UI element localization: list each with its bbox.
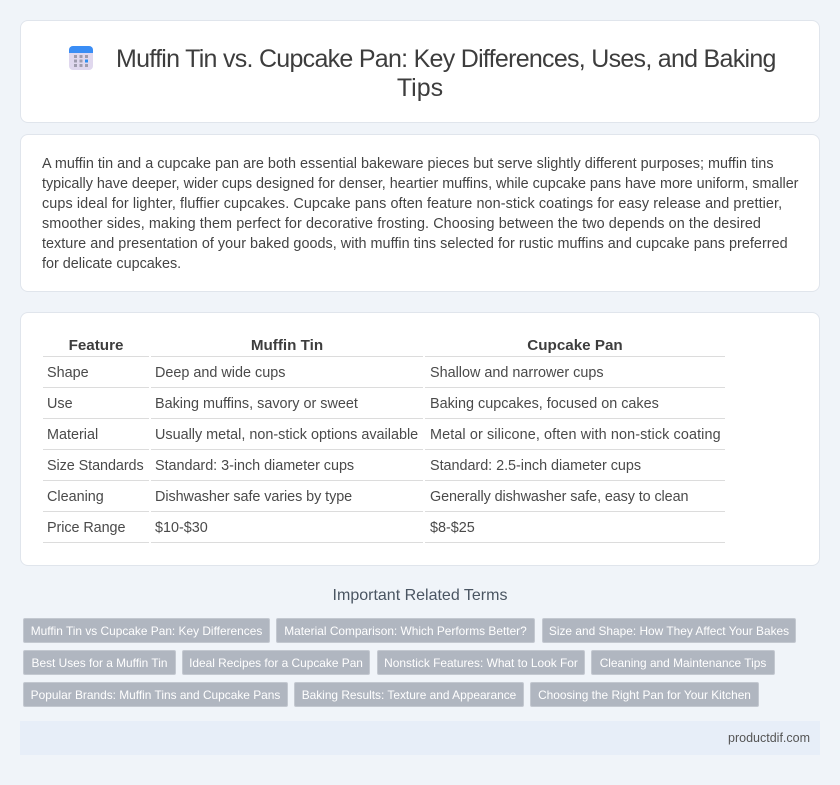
tag: Material Comparison: Which Performs Better? xyxy=(284,624,527,638)
row: Cleaning: Generally dishwasher safe, easy to clean xyxy=(430,489,688,505)
tag xyxy=(276,618,535,643)
text block: introduction: smoother sides, making them perfect for decorative frosting. Choosing between the two depends on the desired xyxy=(42,216,761,232)
row: Shape xyxy=(47,365,604,381)
text block: introduction: for delicate cupcakes. xyxy=(42,256,181,272)
tag xyxy=(23,618,270,643)
text block: introduction: A muffin tin and a cupcake pan are both essential bakeware pieces but serve slightly different purposes; muffin tins xyxy=(42,156,774,172)
tag xyxy=(377,650,585,675)
row: Size Standards xyxy=(47,458,641,474)
tag xyxy=(182,650,370,675)
row: Cleaning xyxy=(47,489,688,505)
row: Use xyxy=(47,396,659,412)
row: Use: Baking cupcakes, focused on cakes xyxy=(430,396,659,412)
footer bar xyxy=(20,721,820,755)
text block: introduction xyxy=(42,156,798,272)
row: Price Range: $8-$25 xyxy=(430,520,475,536)
row: Price Range xyxy=(47,520,475,536)
tag xyxy=(530,682,759,707)
tag: Nonstick Features: What to Look For xyxy=(384,656,578,670)
title xyxy=(116,45,776,102)
row: Price Range: $10-$30 xyxy=(155,520,208,536)
text block: introduction: typically have deeper, wider cups designed for denser, heartier muffins, while cupcake pans have more uniform, smaller xyxy=(42,176,798,192)
tag: Choosing the Right Pan for Your Kitchen xyxy=(538,688,751,702)
heading: Important Related Terms: Important Related Terms xyxy=(333,587,507,604)
tag: Size and Shape: How They Affect Your Bakes xyxy=(549,624,789,638)
row: Size Standards: Size Standards xyxy=(47,458,144,474)
tag: Cleaning and Maintenance Tips xyxy=(600,656,766,670)
panel: introduction xyxy=(20,134,820,292)
tag: Muffin Tin vs Cupcake Pan: Key Differences xyxy=(31,624,262,638)
row: Material: Metal or silicone, often with non-stick coating xyxy=(430,427,721,443)
row: Shape: Shallow and narrower cups xyxy=(430,365,604,381)
title: Muffin Tin vs. Cupcake Pan: Key Differences, Uses, and Baking xyxy=(116,45,776,73)
tag xyxy=(23,650,176,675)
text block: introduction: texture and presentation of your baked goods, with muffin tins selected for rustic muffins and cupcake pans preferred xyxy=(42,236,788,252)
tag: Popular Brands: Muffin Tins and Cupcake Pans xyxy=(31,688,280,702)
title: Tips xyxy=(397,74,443,102)
row: Use: Baking muffins, savory or sweet xyxy=(155,396,358,412)
tag xyxy=(542,618,796,643)
text block: introduction: cups ideal for lighter, fluffier cupcakes. Cupcake pans often feature non-stick coatings for easy release and prettier, xyxy=(42,196,782,212)
table header: Muffin Tin: Muffin Tin xyxy=(251,337,323,354)
row: Size Standards: Standard: 2.5-inch diameter cups xyxy=(430,458,641,474)
row: Use: Use xyxy=(47,396,73,412)
tag: Ideal Recipes for a Cupcake Pan xyxy=(189,656,363,670)
tag: Best Uses for a Muffin Tin xyxy=(32,656,167,670)
row: Material: Material xyxy=(47,427,98,443)
tag: Baking Results: Texture and Appearance xyxy=(302,688,516,702)
row: Cleaning: Dishwasher safe varies by type xyxy=(155,489,352,505)
tag list: related terms xyxy=(23,618,796,707)
panel: comparison table xyxy=(20,312,820,566)
tag xyxy=(591,650,775,675)
footer text: productdif.com: productdif.com xyxy=(728,731,810,745)
table header: Feature: Feature xyxy=(69,337,123,354)
table header: Cupcake Pan: Cupcake Pan xyxy=(527,337,623,354)
tag xyxy=(294,682,524,707)
row: Material xyxy=(47,427,721,443)
row: Size Standards: Standard: 3-inch diameter cups xyxy=(155,458,354,474)
row: Cleaning: Cleaning xyxy=(47,489,104,505)
row: Material: Usually metal, non-stick options available xyxy=(155,427,418,443)
tag xyxy=(23,682,288,707)
icon: calendar grid xyxy=(69,46,93,70)
panel: header xyxy=(20,20,820,123)
row: Price Range: Price Range xyxy=(47,520,125,536)
row: Shape: Deep and wide cups xyxy=(155,365,285,381)
row: Shape: Shape xyxy=(47,365,89,381)
